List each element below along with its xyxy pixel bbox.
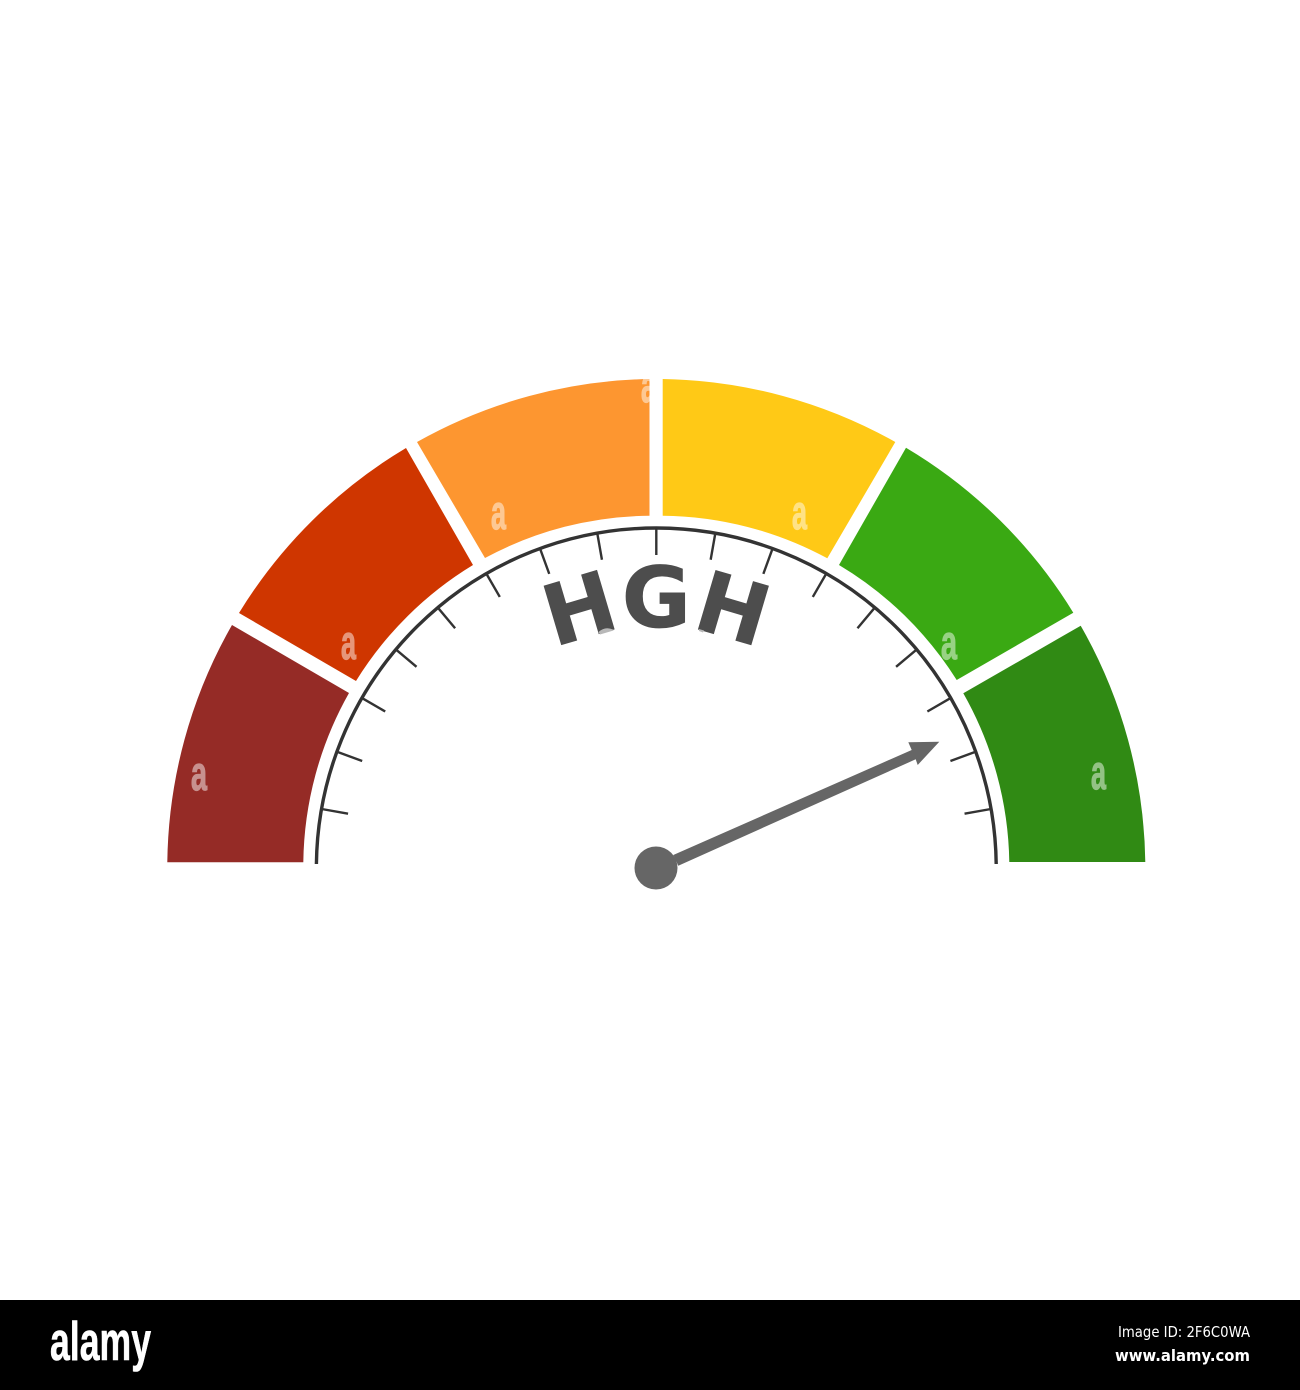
footer site address: www.alamy.com	[1115, 1346, 1250, 1365]
segment: yellow	[663, 379, 895, 558]
curved gauge label: HGH	[532, 549, 781, 666]
watermark letters on segments: a	[941, 617, 957, 670]
segment: red	[239, 448, 473, 681]
needle with arrow head and hub	[634, 742, 939, 890]
segment: orange	[417, 379, 650, 558]
watermark letters on segments: a	[641, 360, 656, 413]
watermark letters on segments: a	[1091, 747, 1106, 800]
watermark letters on segments: a	[792, 487, 807, 540]
curved gauge label: HGH: H	[685, 552, 781, 666]
footer image id: Image ID: 2F6C0WA	[1118, 1323, 1251, 1341]
segment: green	[839, 448, 1073, 680]
segment: dark green	[963, 626, 1145, 862]
watermark letters on segments	[191, 360, 1106, 801]
curved gauge label: HGH: H	[532, 552, 627, 666]
watermark letters on segments: a	[191, 748, 207, 801]
watermark letters on segments: a	[491, 487, 506, 540]
gauge: coloured segments	[167, 379, 1145, 862]
footer bar	[0, 1300, 1300, 1390]
curved gauge label: HGH: G	[622, 549, 691, 647]
footer logo: alamy: alamy	[50, 1310, 151, 1372]
watermark traces on the HGH letters	[598, 628, 704, 634]
scale arc with tick marks	[316, 528, 996, 864]
segment: dark red	[167, 625, 349, 862]
watermark letters on segments: a	[341, 617, 356, 670]
